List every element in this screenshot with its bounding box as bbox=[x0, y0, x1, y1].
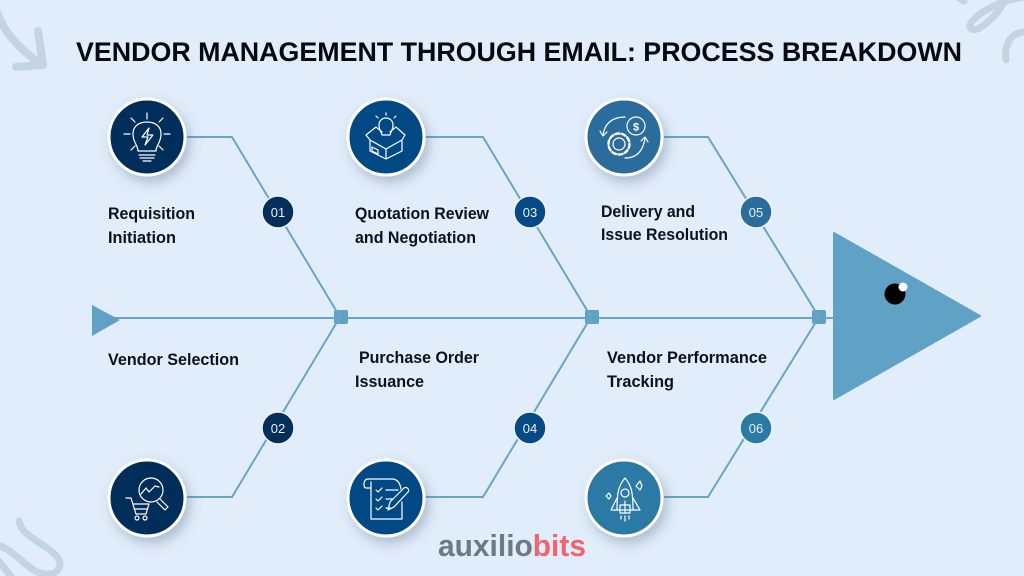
label: Requisition Initiation: Initiation bbox=[108, 229, 176, 247]
title: VENDOR MANAGEMENT THROUGH EMAIL: PROCESS BREAKDOWN bbox=[76, 37, 962, 67]
number badge 04 bbox=[514, 412, 546, 444]
number badge 05: 05 bbox=[749, 205, 763, 220]
step 01 icon: light bulb bbox=[109, 99, 185, 175]
number badge 06: 06 bbox=[749, 421, 763, 436]
label: Purchase Order Issuance: Issuance bbox=[355, 373, 424, 391]
dollar sign: $ bbox=[633, 122, 639, 134]
step 04 icon: checklist and pen bbox=[348, 460, 424, 536]
label: Vendor Performance Tracking: Vendor Performance bbox=[607, 349, 767, 367]
label: Vendor Performance Tracking bbox=[607, 349, 767, 391]
fish spine bbox=[110, 317, 835, 319]
label: Purchase Order Issuance: Purchase Order bbox=[359, 349, 480, 367]
number badge 01: 01 bbox=[271, 205, 285, 220]
label: Quotation Review and Negotiation: and Negotiation bbox=[355, 229, 476, 247]
label: Quotation Review and Negotiation bbox=[355, 205, 489, 247]
label: Vendor Selection: Vendor Selection bbox=[108, 351, 239, 369]
step 06 icon: rocket bbox=[586, 460, 662, 536]
spine junctions bbox=[334, 310, 826, 324]
label: Delivery and Issue Resolution: Delivery and bbox=[601, 203, 695, 221]
step 02 icon: cart and magnifier bbox=[109, 460, 185, 536]
label: Delivery and Issue Resolution bbox=[601, 203, 728, 244]
number badge 06 bbox=[740, 412, 772, 444]
label: Vendor Performance Tracking: Tracking bbox=[607, 373, 674, 391]
decoration: bottom-left squiggle bbox=[0, 521, 60, 576]
label: Purchase Order Issuance bbox=[355, 349, 480, 391]
number badge 04: 04 bbox=[523, 421, 537, 436]
number badge 03 bbox=[514, 196, 546, 228]
label: Requisition Initiation: Requisition bbox=[108, 205, 195, 223]
number badge 02 bbox=[262, 412, 294, 444]
decoration: top-left arrow bbox=[0, 14, 43, 67]
bone lines bbox=[187, 137, 819, 497]
step 03 icon: box with bulb bbox=[348, 99, 424, 175]
step 05 icon: gear, dollar and arrows bbox=[586, 99, 662, 175]
number badge 01 bbox=[262, 196, 294, 228]
decoration: top-right loop bbox=[958, 0, 1024, 60]
label: Quotation Review and Negotiation: Quotation Review bbox=[355, 205, 489, 223]
fish tail bbox=[92, 305, 120, 336]
number badge 02: 02 bbox=[271, 421, 285, 436]
fish head bbox=[834, 233, 980, 399]
number badge 05 bbox=[740, 196, 772, 228]
label: Delivery and Issue Resolution: Issue Resolution bbox=[601, 226, 728, 244]
number badge 03: 03 bbox=[523, 205, 537, 220]
label: Requisition Initiation bbox=[108, 205, 195, 247]
logo: auxiliobits: auxiliobits bbox=[438, 528, 586, 563]
